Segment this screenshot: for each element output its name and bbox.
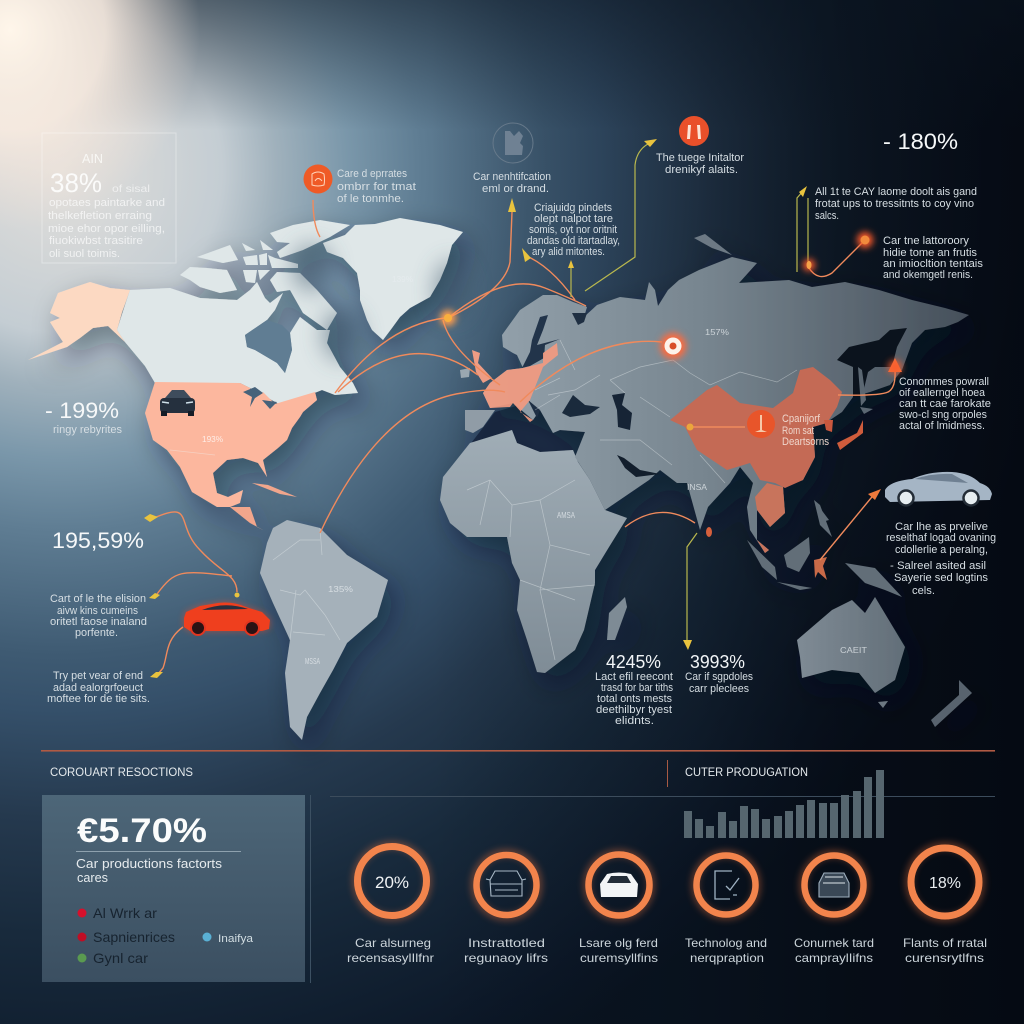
- callout: silver car text: reselthaf logad ovaning: [886, 532, 996, 544]
- ring metric: 18%: 18%: [929, 875, 961, 892]
- stat description: opotaes paintarke and: [49, 197, 165, 209]
- callout: Japan text: oif eallerngel hoea: [899, 387, 986, 399]
- arc: Indonesia to car: [820, 492, 876, 560]
- Sakhalin: [858, 367, 866, 406]
- label: Argentina: MSSA: [305, 656, 320, 666]
- stat: Indian Ocean left: [595, 652, 673, 727]
- ring metric: white car icon: [587, 853, 651, 917]
- callout: lower left text: Cart of le the elision: [50, 593, 146, 605]
- callout: lower left text: porfente.: [75, 627, 118, 639]
- stat description: [48, 197, 165, 260]
- node: Japan arrow glow: [888, 360, 902, 374]
- UK highlight: [472, 350, 492, 383]
- map: borders: [170, 340, 797, 660]
- callout: centre north text: olept nalpot tare: [534, 213, 613, 225]
- node: Atlantic hub: [440, 310, 456, 326]
- USA and Mexico: [145, 382, 317, 507]
- car: silver: [885, 472, 992, 506]
- stat text: deethilbyr tyest: [596, 704, 672, 716]
- Japan: [837, 420, 863, 450]
- stat: left: [45, 398, 122, 436]
- ring metric: 18%: [909, 846, 981, 918]
- map: highlighted regions: [472, 343, 873, 580]
- summary value: €5.70%: [77, 812, 207, 850]
- callout: Siberia text: [883, 235, 984, 281]
- ring caption 6: [903, 936, 987, 965]
- callout: centre north text: Criajuidg pindets: [534, 202, 612, 214]
- callout: silver car text: [886, 521, 996, 597]
- sea: Mediterranean: [472, 402, 590, 458]
- callout: top badge text: ombrr for tmat: [337, 181, 416, 193]
- stat text: Lact efil reecont: [595, 671, 673, 683]
- arc: hub to Scandinavia: [448, 284, 586, 318]
- yellow arrowheads: [144, 139, 807, 678]
- section divider: [41, 750, 995, 752]
- callout: China text: Rom sat: [782, 425, 814, 437]
- callout: Siberia text: Car tne lattoroory: [883, 235, 970, 247]
- stat: lower left: 195,59%: [52, 528, 144, 553]
- icon: grey ring badge: [493, 123, 533, 163]
- arc: hub up to north: [448, 212, 512, 318]
- world map: [28, 218, 972, 740]
- arc: South America to Europe: [320, 390, 505, 533]
- callout: centre north text: dandas old itartadlay,: [527, 235, 620, 247]
- Hudson Bay: [245, 320, 292, 373]
- callout: Siberia text: hidie tome an frutis: [883, 247, 978, 259]
- callout: bottom left text: [47, 670, 150, 705]
- label: USA: 193%: [202, 434, 223, 444]
- callout: Siberia text: and okemgetl renis.: [883, 269, 973, 281]
- glowing nodes: [440, 232, 902, 430]
- label: Greenland: 139%: [392, 274, 413, 284]
- legend: Gynl car: [93, 950, 148, 966]
- callout: lower left text: aivw kins cumeins: [57, 605, 138, 617]
- arc: car to lower marker: [158, 627, 183, 674]
- New Zealand: [931, 680, 972, 727]
- callout: silver car text: Car lhe as prvelive: [895, 521, 988, 533]
- stat: Indian Ocean right: 3993%: [690, 652, 745, 672]
- callout: top badge text: of le tonmhe.: [337, 193, 404, 205]
- Cuba and Caribbean: [252, 483, 297, 497]
- node: Siberia marker: [803, 259, 815, 271]
- ring caption 5: campraylIifns: [795, 951, 873, 965]
- callout: Japan text: actal of lmidmess.: [899, 420, 985, 432]
- callout: ring badge text: eml or drand.: [482, 183, 549, 195]
- stat text: elidnts.: [615, 715, 654, 727]
- Alaska: [28, 282, 130, 360]
- callout: bottom left text: Try pet vear of end: [53, 670, 143, 682]
- Caspian Sea: [612, 393, 632, 430]
- icon: top orange badge: [304, 164, 332, 194]
- ring caption 1: recensasylIlfnr: [347, 951, 434, 965]
- Madagascar: [607, 597, 627, 640]
- ring caption 4: nerqpraption: [690, 951, 764, 965]
- stat text: carr pleclees: [689, 683, 749, 695]
- legend: Sapnienrices: [93, 929, 175, 945]
- arc: Siberia node curve: [809, 240, 865, 277]
- stat text: Car if sgpdoles: [685, 671, 753, 683]
- callout: silver car text: - Salreel asited asil: [890, 560, 986, 572]
- Indonesia and Pacific islands: [747, 500, 902, 597]
- callout: China text: Cpanijorf: [782, 413, 821, 425]
- ring caption 3: Lsare olg ferd: [579, 936, 658, 950]
- Hokkaido: [860, 407, 873, 414]
- icon: China badge: [747, 410, 775, 438]
- stat description: thelkefletion erraing: [48, 210, 152, 222]
- callout: top right text: frotat ups to tressitnts to coy vino: [815, 198, 974, 210]
- callout: lower left text: oritetl faose inaland: [50, 616, 147, 628]
- route arcs: [144, 139, 902, 678]
- callout: China text: Deartsorns: [782, 436, 829, 448]
- China highlight: [670, 367, 842, 488]
- callout: Japan text: can tt cae farokate: [899, 398, 991, 410]
- stat text: trasd for bar tiths: [601, 682, 673, 694]
- summary text: [76, 856, 223, 885]
- callout: top badge text: Care d eprrates: [337, 168, 407, 180]
- callout: red badge text: [656, 152, 744, 176]
- legend: [78, 905, 254, 966]
- stat: top right: - 180%: [883, 129, 958, 154]
- line: China node connector: [690, 426, 745, 428]
- callout: lower left text: [50, 593, 147, 639]
- panel: top-left stat box: [42, 133, 176, 263]
- callout: top right text: salcs.: [815, 210, 839, 222]
- ring caption 4: [685, 936, 767, 965]
- line: yellow route right two: [807, 198, 809, 262]
- arc: China to Japan arrow: [838, 370, 895, 395]
- Europe highlight: [483, 343, 558, 422]
- Great Lakes: [243, 387, 277, 409]
- callout: Japan text: [899, 376, 991, 432]
- callout: centre north text: ary alid mitontes.: [532, 246, 605, 258]
- car: red: [184, 603, 270, 635]
- callout: Japan text: Conommes powrall: [899, 376, 989, 388]
- line: yellow route India to stat: [687, 533, 697, 640]
- line: yellow route to top: [585, 142, 652, 291]
- arc: car to text marker: [157, 573, 232, 594]
- Southeast Asia highlight: [755, 483, 785, 553]
- map: seas and lakes: [243, 313, 907, 477]
- node: Russia: [660, 333, 686, 359]
- stat side text: of sisal: [112, 184, 150, 195]
- legend: Al Wrrk ar: [93, 905, 157, 921]
- callout: bottom left text: moftee for de tie sits.: [47, 693, 150, 705]
- stat: left: - 199%: [45, 398, 119, 423]
- ring caption 1: Car alsurneg: [355, 936, 431, 950]
- ring caption 2: regunaoy lifrs: [464, 951, 548, 965]
- ring caption 5: Conurnek tard: [794, 936, 874, 950]
- ring caption 3: [579, 936, 658, 965]
- summary text: Car productions factorts: [76, 856, 223, 871]
- ring caption 6: Flants of rratal: [903, 936, 987, 950]
- arc: Atlantic lower: [338, 354, 478, 392]
- ring caption 1: [347, 936, 434, 965]
- map: land masses: [28, 218, 972, 740]
- ring metric: 20%: 20%: [375, 873, 409, 892]
- ring metric: 20%: [356, 845, 428, 917]
- node: Siberia: [857, 232, 873, 248]
- callout: Siberia text: an imiocltion tentais: [883, 258, 984, 270]
- ring metric: document check icon: [695, 854, 757, 916]
- stat text: total onts mests: [597, 693, 672, 705]
- Adriatic: [528, 400, 540, 418]
- callout: silver car text: Sayerie sed logtins: [894, 572, 988, 584]
- ring caption 2: Instrattotled: [468, 936, 545, 950]
- arc: Europe to Russia: [520, 341, 662, 402]
- callout: top badge text: [337, 168, 416, 205]
- South America: [260, 520, 388, 740]
- Africa: [440, 430, 627, 673]
- ring metric: front car icon: [803, 854, 865, 916]
- Novaya Zemlya: [694, 234, 732, 255]
- car: dark USA: [160, 390, 195, 416]
- label: Russia: 157%: [705, 327, 729, 337]
- stat text: [685, 671, 753, 695]
- label: Australia: CAEIT: [840, 645, 867, 655]
- ring caption 5: [794, 936, 874, 965]
- panel: production summary: [42, 795, 305, 982]
- callout: centre north text: somis, oyt nor oritnit: [529, 224, 617, 236]
- arc: top callout stem: [313, 200, 320, 237]
- heading: right section: CUTER PRODUGATION: [685, 765, 808, 779]
- stat value: 38%: [50, 168, 102, 198]
- orange arrowheads: [868, 358, 902, 500]
- callout: top right text: [815, 186, 977, 222]
- Ireland: [460, 368, 470, 378]
- Canada: [117, 282, 358, 407]
- heading: left section: COROUART RESOCTIONS: [50, 765, 193, 779]
- legend: Inaifya: [218, 933, 254, 945]
- label: Africa: AMSA: [557, 510, 575, 520]
- line: yellow route Scandinavia: [570, 266, 572, 297]
- Sulawesi: [814, 557, 827, 580]
- line: yellow route right: [797, 190, 804, 272]
- stat description: fiuokiwbst trasitire: [49, 235, 143, 247]
- ring caption 6: curensrytlfns: [905, 951, 984, 965]
- arc: Scandinavia to yellow marker: [524, 255, 575, 300]
- map percentage labels: [202, 274, 867, 666]
- Australia: [797, 597, 905, 693]
- summary text: cares: [77, 870, 108, 885]
- ring metric: line car icon: [474, 853, 538, 917]
- Central America: [230, 507, 263, 530]
- Korea highlight: [824, 420, 833, 432]
- callout: Japan text: swo-cl sng orpoles: [899, 409, 987, 421]
- Baltic Sea: [522, 315, 560, 368]
- ring caption 4: Technolog and: [685, 936, 767, 950]
- Sea of Okhotsk: [837, 328, 907, 397]
- Black Sea: [562, 395, 600, 417]
- arc: Africa to India: [625, 512, 695, 527]
- arc: hub to Europe: [443, 320, 500, 385]
- callout: centre north text: [527, 202, 620, 258]
- icon: red orange top badge: [679, 116, 709, 146]
- stat: Indian Ocean left: 4245%: [606, 652, 661, 672]
- Arctic islands: [180, 220, 350, 330]
- callout: China text: [782, 413, 829, 448]
- Persian Gulf: [617, 455, 660, 477]
- callout: red badge text: The tuege Initaltor: [656, 152, 744, 164]
- stat label: AIN: [82, 151, 103, 166]
- arc: Atlantic upper: [335, 318, 445, 393]
- ring caption 2: [464, 936, 548, 965]
- ring caption 3: curemsyllfins: [580, 951, 658, 965]
- Tasmania: [878, 701, 888, 708]
- bar chart: [684, 770, 884, 838]
- Iberia: [465, 410, 495, 433]
- Greenland: [323, 218, 463, 340]
- stat: Indian Ocean right: [685, 652, 753, 695]
- label: India: INSA: [687, 482, 707, 492]
- callout: top right text: All 1t te CAY laome doolt ais gand: [815, 186, 977, 198]
- callout: red badge text: drenikyf alaits.: [665, 164, 738, 176]
- stat description: oli suol toimis.: [49, 248, 120, 260]
- Eurasia: [483, 257, 969, 553]
- node: yellow China source: [686, 424, 694, 430]
- stat description: mioe ehor opor eilling,: [48, 223, 165, 235]
- callout: silver car text: cdollerlie a peralng,: [895, 544, 988, 556]
- White Sea: [572, 313, 587, 325]
- map: shadow pools near Greenland: [294, 246, 468, 359]
- arc: car to upper left marker: [154, 512, 237, 592]
- Sri Lanka: [706, 527, 712, 537]
- callout: ring badge text: [473, 171, 551, 195]
- callout: silver car text: cels.: [912, 585, 935, 597]
- callout: ring badge text: Car nenhtifcation: [473, 171, 551, 183]
- stat caption: ringy rebyrites: [53, 424, 122, 436]
- label: Brazil: 135%: [328, 584, 353, 594]
- callout: bottom left text: adad ealorgrfoeuct: [53, 682, 143, 694]
- stat text: [595, 671, 673, 727]
